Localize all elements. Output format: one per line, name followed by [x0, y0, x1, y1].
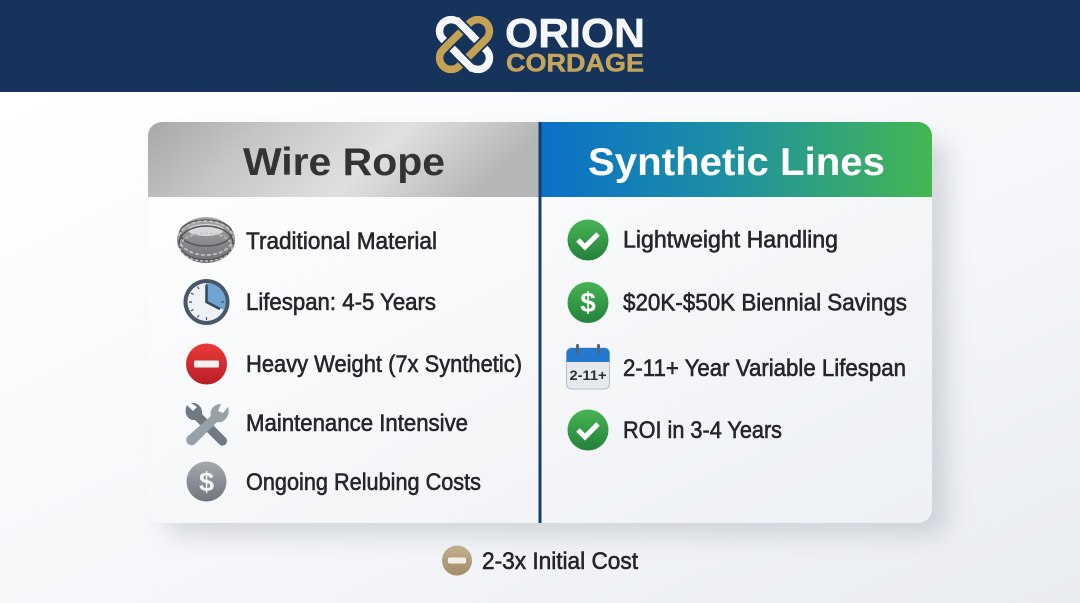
heading: Wire Rope: Wire Rope	[243, 141, 445, 184]
footnote: initial cost	[442, 546, 638, 576]
icon: green check	[568, 220, 608, 260]
center divider	[538, 122, 542, 523]
text: variable lifespan: 2-11+ Year Variable Lifespan	[623, 355, 906, 382]
panel header: Wire Rope	[148, 122, 539, 197]
icon: calendar	[566, 344, 610, 389]
comparison card	[148, 122, 932, 523]
wrench head right	[186, 404, 229, 445]
icon: green check	[568, 410, 608, 450]
panel: synthetic lines list	[566, 220, 907, 450]
icon: calendar: 2-11+	[570, 367, 606, 383]
icon: interlocked logo knot	[435, 15, 494, 74]
text: Lifespan: Lifespan: 4-5 Years	[246, 289, 436, 316]
text: ROI: ROI in 3-4 Years	[623, 417, 782, 444]
header band with logo	[0, 0, 1080, 92]
panel: wire rope list	[177, 217, 522, 502]
wrench head left	[186, 403, 227, 446]
icon: crossed tools	[186, 403, 229, 446]
heading: Synthetic Lines: Synthetic Lines	[588, 141, 885, 184]
icon: grey dollar: $	[199, 467, 214, 497]
icon: wire coil	[177, 217, 235, 263]
icon: red minus	[186, 344, 227, 384]
icon: grey dollar	[186, 462, 226, 502]
icon: green dollar	[568, 282, 608, 323]
panel header: Synthetic Lines	[540, 122, 932, 197]
logo wordmark: ORION: ORION	[505, 10, 645, 56]
text: Heavy Weight: Heavy Weight (7x Synthetic)	[246, 351, 522, 378]
logo wordmark: CORDAGE: CORDAGE	[506, 50, 644, 78]
icon: tan minus	[442, 546, 472, 576]
icon: clock	[184, 279, 230, 325]
text: savings: $20K-$50K Biennial Savings	[623, 290, 907, 316]
text: 2-3x Initial Cost: 2-3x Initial Cost	[482, 548, 638, 575]
text: Maintenance Intensive: Maintenance Intensive	[246, 410, 468, 437]
text: Ongoing Relubing Costs: Ongoing Relubing Costs	[246, 469, 481, 496]
text: Lightweight Handling: Lightweight Handling	[623, 226, 838, 254]
comparison card shadow	[166, 140, 948, 536]
text: Traditional Material: Traditional Material	[246, 228, 437, 255]
icon: green dollar: $	[580, 287, 596, 318]
